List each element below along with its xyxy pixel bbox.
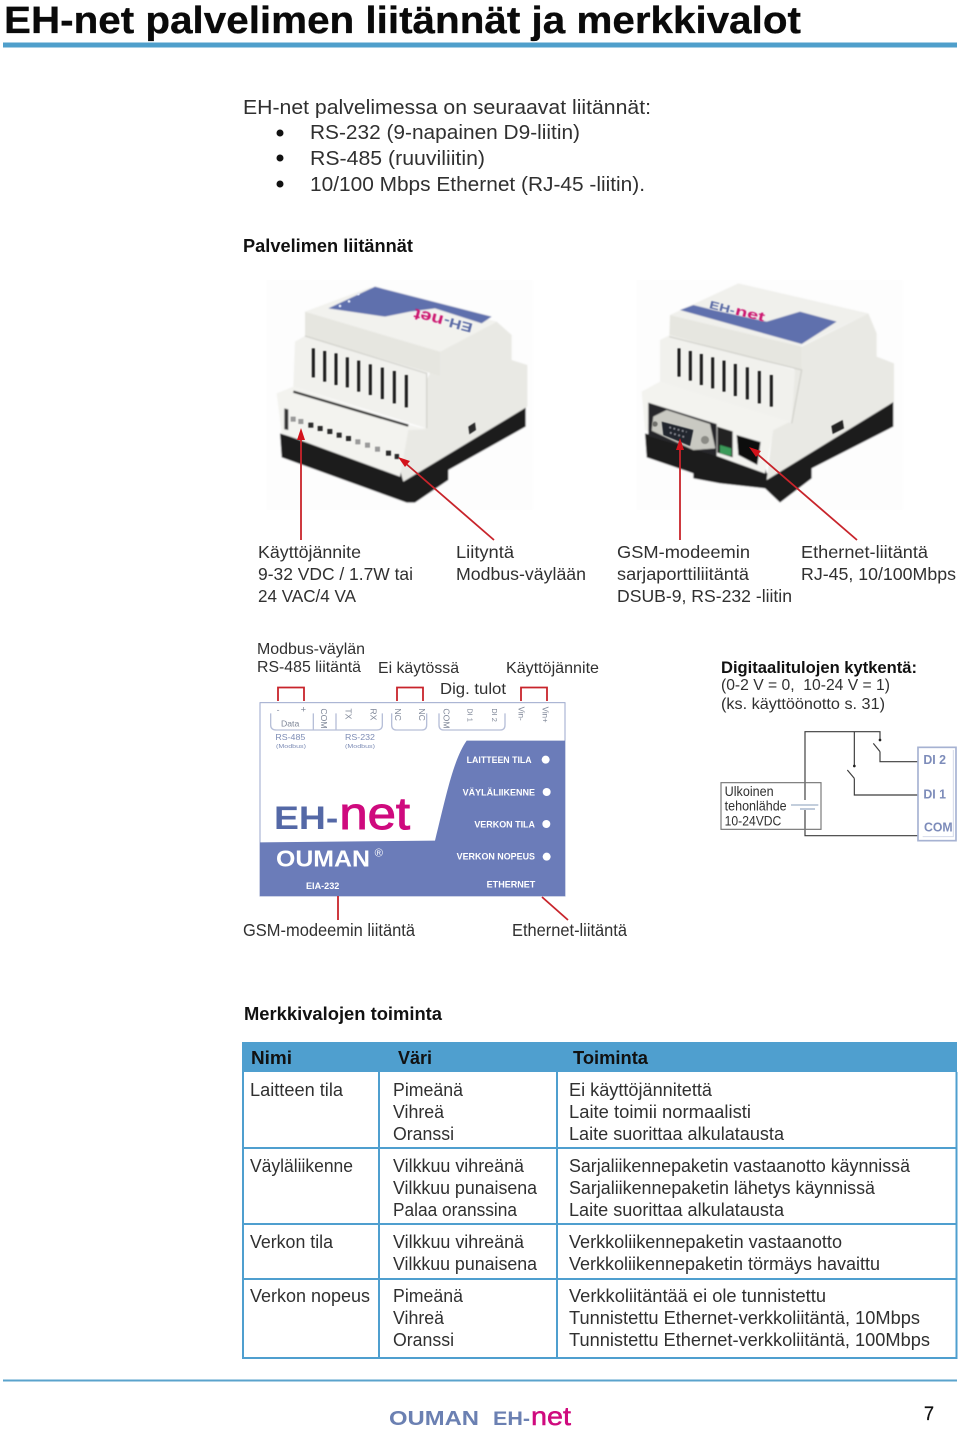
arrow: käyttöjännite xyxy=(297,428,305,540)
label: Modbus-väylän RS-485 liitäntä xyxy=(257,641,365,676)
row: Verkon nopeus: Verkon nopeus xyxy=(250,1286,370,1306)
terminal labels: DI 1 xyxy=(466,708,475,722)
text: Digitaalitulojen kytkentä: (0-2 V = 0, 10-24 V = 1) xyxy=(721,677,890,694)
LED labels: LAITTEEN TILA xyxy=(467,755,532,765)
label on device top: EH- xyxy=(442,314,474,336)
caption: GSM-modeemin xyxy=(617,542,792,606)
blue label background xyxy=(260,741,565,896)
footer logo: EH-net xyxy=(493,1401,572,1429)
line: GSM-modeemin liitäntä xyxy=(337,896,339,920)
text: Digitaalitulojen kytkentä: (ks. käyttöönotto s. 31) xyxy=(721,696,885,713)
row: Laitteen tila: Vihreä xyxy=(393,1102,445,1122)
row: Väyläliikenne: Palaa oranssina xyxy=(393,1200,518,1220)
diagram: digital input wiring xyxy=(721,732,956,841)
row: Väyläliikenne xyxy=(250,1156,911,1220)
terminal labels xyxy=(275,705,550,750)
table header: Toiminta xyxy=(573,1048,649,1068)
label on device top xyxy=(412,305,474,337)
caption: liityntä: Modbus-väylään xyxy=(456,564,586,584)
terminal labels: NC xyxy=(393,708,403,721)
terminal labels: - xyxy=(277,705,280,715)
row: Laitteen tila: Pimeänä xyxy=(393,1080,464,1100)
terminal labels: (Modbus) xyxy=(276,744,306,750)
terminal labels: DI 2 xyxy=(490,708,499,722)
terminal outlines xyxy=(271,713,505,730)
row: Verkon nopeus: Vihreä xyxy=(393,1308,445,1328)
page number: 7 xyxy=(924,1404,934,1425)
caption: GSM-modeemin: DSUB-9, RS-232 -liitin xyxy=(617,586,792,606)
power supply box: 10-24VDC xyxy=(725,813,781,828)
row: Verkon nopeus: Tunnistettu Ethernet-verkkoliitäntä, 10Mbps xyxy=(569,1308,920,1328)
row: Verkon nopeus: Pimeänä xyxy=(393,1286,464,1306)
caption: käyttöjännite: 9-32 VDC / 1.7W tai xyxy=(258,564,413,584)
LED labels: ETHERNET xyxy=(487,879,536,889)
row: Väyläliikenne: Vilkkuu vihreänä xyxy=(393,1156,525,1176)
label on device top xyxy=(708,296,767,325)
wires xyxy=(805,732,918,836)
caption: ethernet xyxy=(801,542,956,584)
caption: liityntä: Liityntä xyxy=(456,542,514,562)
label: Modbus-väylän RS-485 liitäntä: Modbus-väylän xyxy=(257,641,365,658)
panel: device front label xyxy=(260,703,565,896)
photo: device connector side xyxy=(637,280,903,510)
row: Verkon nopeus: Oranssi xyxy=(393,1330,454,1350)
caption: käyttöjännite: Käyttöjännite xyxy=(258,542,361,562)
label on device top: net xyxy=(412,305,445,329)
caption: käyttöjännite: 24 VAC/4 VA xyxy=(258,586,356,606)
arrow: ethernet xyxy=(749,447,857,540)
power supply box: tehonlähde xyxy=(725,799,787,814)
brackets: connector markers xyxy=(278,688,547,701)
label: Dig. tulot: Dig. tulot xyxy=(440,681,507,698)
title: EH-net palvelimen liitännät ja merkkivalot xyxy=(4,0,801,42)
caption: ethernet: RJ-45, 10/100Mbps xyxy=(801,564,956,584)
terminal labels: RS-232 xyxy=(345,732,375,742)
LED labels: EIA-232 xyxy=(306,881,339,891)
DSUB connector xyxy=(652,421,709,446)
label: Modbus-väylän RS-485 liitäntä: RS-485 liitäntä xyxy=(257,659,361,676)
row: Verkon tila: Vilkkuu vihreänä xyxy=(393,1232,525,1252)
row: Verkon tila: Vilkkuu punaisena xyxy=(393,1254,538,1274)
terminal labels: COM xyxy=(319,708,329,729)
label on device top: net xyxy=(734,303,767,325)
logo: EH-net: net xyxy=(339,788,411,839)
terminal labels: Vin- xyxy=(516,707,525,721)
intro text xyxy=(243,97,651,196)
row: Väyläliikenne: Sarjaliikennepaketin lähetys käynnissä xyxy=(569,1178,876,1198)
LED labels: VÄYLÄLIIKENNE xyxy=(463,787,535,797)
terminal labels: + xyxy=(301,705,306,715)
row: Verkon tila xyxy=(250,1232,880,1274)
LED indicators xyxy=(542,756,551,861)
row: Laitteen tila: Laite suorittaa alkulatausta xyxy=(569,1124,785,1144)
caption: GSM-modeemin: GSM-modeemin xyxy=(617,542,750,562)
terminal labels: COM xyxy=(442,708,452,729)
table header xyxy=(242,1042,957,1072)
table: merkkivalot xyxy=(242,1042,957,1358)
label: Ethernet-liitäntä: Ethernet-liitäntä xyxy=(512,920,627,940)
bullet list: 10/100 Mbps Ethernet (RJ-45 -liitin). xyxy=(310,174,645,196)
caption: GSM-modeemin: sarjaporttiliitäntä xyxy=(617,564,749,584)
row: Verkon nopeus xyxy=(250,1286,930,1350)
power supply box xyxy=(721,783,821,829)
heading: Palvelimen liitännät: Palvelimen liitännät xyxy=(243,236,413,256)
logo: OUMAN: OUMAN xyxy=(276,845,370,871)
logo: EH-net: EH- xyxy=(274,799,338,836)
bullet list: RS-485 (ruuviliitin) xyxy=(310,148,485,170)
text: Digitaalitulojen kytkentä xyxy=(721,659,917,713)
caption: liityntä xyxy=(456,542,586,584)
logo: OUMAN: ® xyxy=(375,848,384,860)
row: Väyläliikenne: Sarjaliikennepaketin vastaanotto käynnissä xyxy=(569,1156,911,1176)
terminal labels: NC xyxy=(417,708,427,721)
row: Laitteen tila xyxy=(250,1080,785,1144)
LED labels: VERKON TILA xyxy=(474,819,535,829)
terminal labels: RS-485 xyxy=(275,732,306,742)
row: Verkon tila: Verkkoliikennepaketin törmäys havaittu xyxy=(569,1254,880,1274)
DI terminal block: COM xyxy=(924,820,953,834)
LED labels xyxy=(306,755,536,891)
table grid xyxy=(243,1072,956,1358)
logo: EH-net xyxy=(274,788,411,839)
row: Laitteen tila: Oranssi xyxy=(393,1124,454,1144)
terminal labels: Data xyxy=(281,719,299,729)
photo: device terminal side xyxy=(267,280,533,510)
row: Laitteen tila: Laitteen tila xyxy=(250,1080,344,1100)
table header: Väri xyxy=(398,1048,432,1068)
table header: Nimi xyxy=(251,1048,292,1068)
row: Verkon tila: Verkon tila xyxy=(250,1232,334,1252)
row: Väyläliikenne: Väyläliikenne xyxy=(250,1156,353,1176)
row: Verkon tila: Verkkoliikennepaketin vastaanotto xyxy=(569,1232,842,1252)
terminal labels: Vin+ xyxy=(541,707,550,723)
DI terminal block xyxy=(918,747,956,841)
label: Ei käytössä: Ei käytössä xyxy=(378,660,459,677)
DI terminal block: DI 1 xyxy=(923,788,946,802)
intro text: EH-net palvelimessa on seuraavat liitännät: xyxy=(243,97,651,119)
LED labels: VERKON NOPEUS xyxy=(457,852,535,862)
bullet list: RS-232 (9-napainen D9-liitin) xyxy=(310,122,580,144)
DI terminal block: DI 2 xyxy=(923,753,946,767)
row: Verkon nopeus: Verkkoliitäntää ei ole tunnistettu xyxy=(569,1286,826,1306)
label: Käyttöjännite: Käyttöjännite xyxy=(506,660,599,677)
label on device top: EH- xyxy=(708,299,736,317)
caption: käyttöjännite xyxy=(258,542,413,606)
line: Ethernet-liitäntä xyxy=(542,897,568,920)
caption: ethernet: Ethernet-liitäntä xyxy=(801,542,928,562)
heading: Merkkivalojen toiminta: Merkkivalojen toiminta xyxy=(244,1004,443,1024)
row: Laitteen tila: Laite toimii normaalisti xyxy=(569,1102,751,1122)
row: Laitteen tila: Ei käyttöjännitettä xyxy=(569,1080,713,1100)
power supply box: Ulkoinen xyxy=(725,784,774,799)
terminal labels: RX xyxy=(369,708,379,721)
arrow: liityntä xyxy=(398,457,494,540)
text: Digitaalitulojen kytkentä: Digitaalitulojen kytkentä: xyxy=(721,659,917,677)
row: Väyläliikenne: Laite suorittaa alkulatausta xyxy=(569,1200,785,1220)
row: Verkon nopeus: Tunnistettu Ethernet-verkkoliitäntä, 100Mbps xyxy=(569,1330,930,1350)
row: Väyläliikenne: Vilkkuu punaisena xyxy=(393,1178,538,1198)
arrow: GSM-modeemin xyxy=(676,438,684,540)
terminal labels: (Modbus) xyxy=(345,744,375,750)
label: GSM-modeemin liitäntä: GSM-modeemin liitäntä xyxy=(243,920,415,940)
terminal labels: TX xyxy=(344,708,354,720)
bullet list xyxy=(276,122,645,196)
